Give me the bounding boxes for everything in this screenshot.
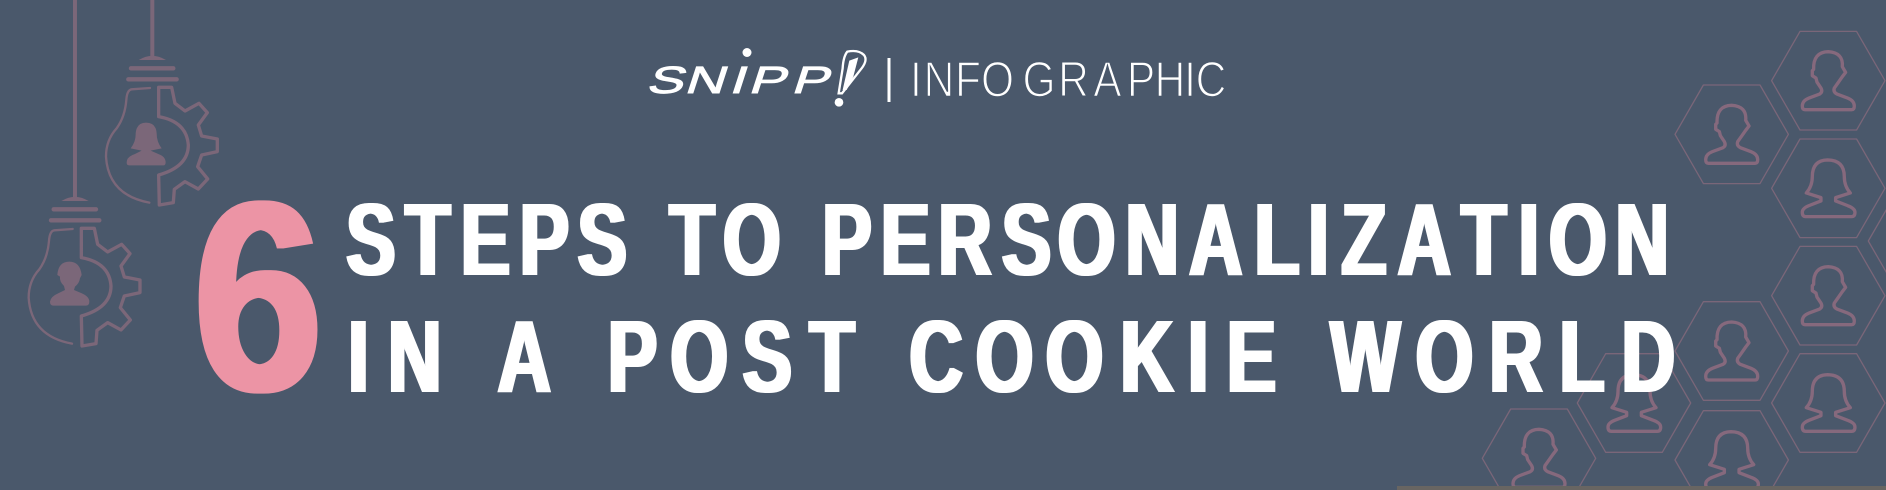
logo phone exclamation bbox=[835, 51, 866, 107]
title bbox=[346, 183, 1675, 415]
icon: hanging light bulb with gear and man bbox=[29, 0, 140, 346]
hexagon people pattern bbox=[1482, 31, 1886, 490]
bulb wire right bbox=[150, 0, 154, 57]
icon: hanging light bulb with gear and woman bbox=[106, 0, 217, 205]
logo divider bbox=[888, 58, 890, 102]
logo wordmark: SNIPP bbox=[643, 59, 838, 102]
title line 2: IN A POST COOKIE WORLD bbox=[348, 300, 1675, 415]
bottom bar bbox=[1397, 486, 1886, 490]
label: infographic: INFOGRAPHIC bbox=[910, 51, 1226, 107]
logo i dot bbox=[742, 48, 752, 57]
logo: Snipp bbox=[643, 48, 866, 107]
big pink number 6: 6 bbox=[193, 144, 323, 449]
title line 1: STEPS TO PERSONALIZATION bbox=[346, 183, 1669, 298]
bulb wire left bbox=[73, 0, 77, 197]
